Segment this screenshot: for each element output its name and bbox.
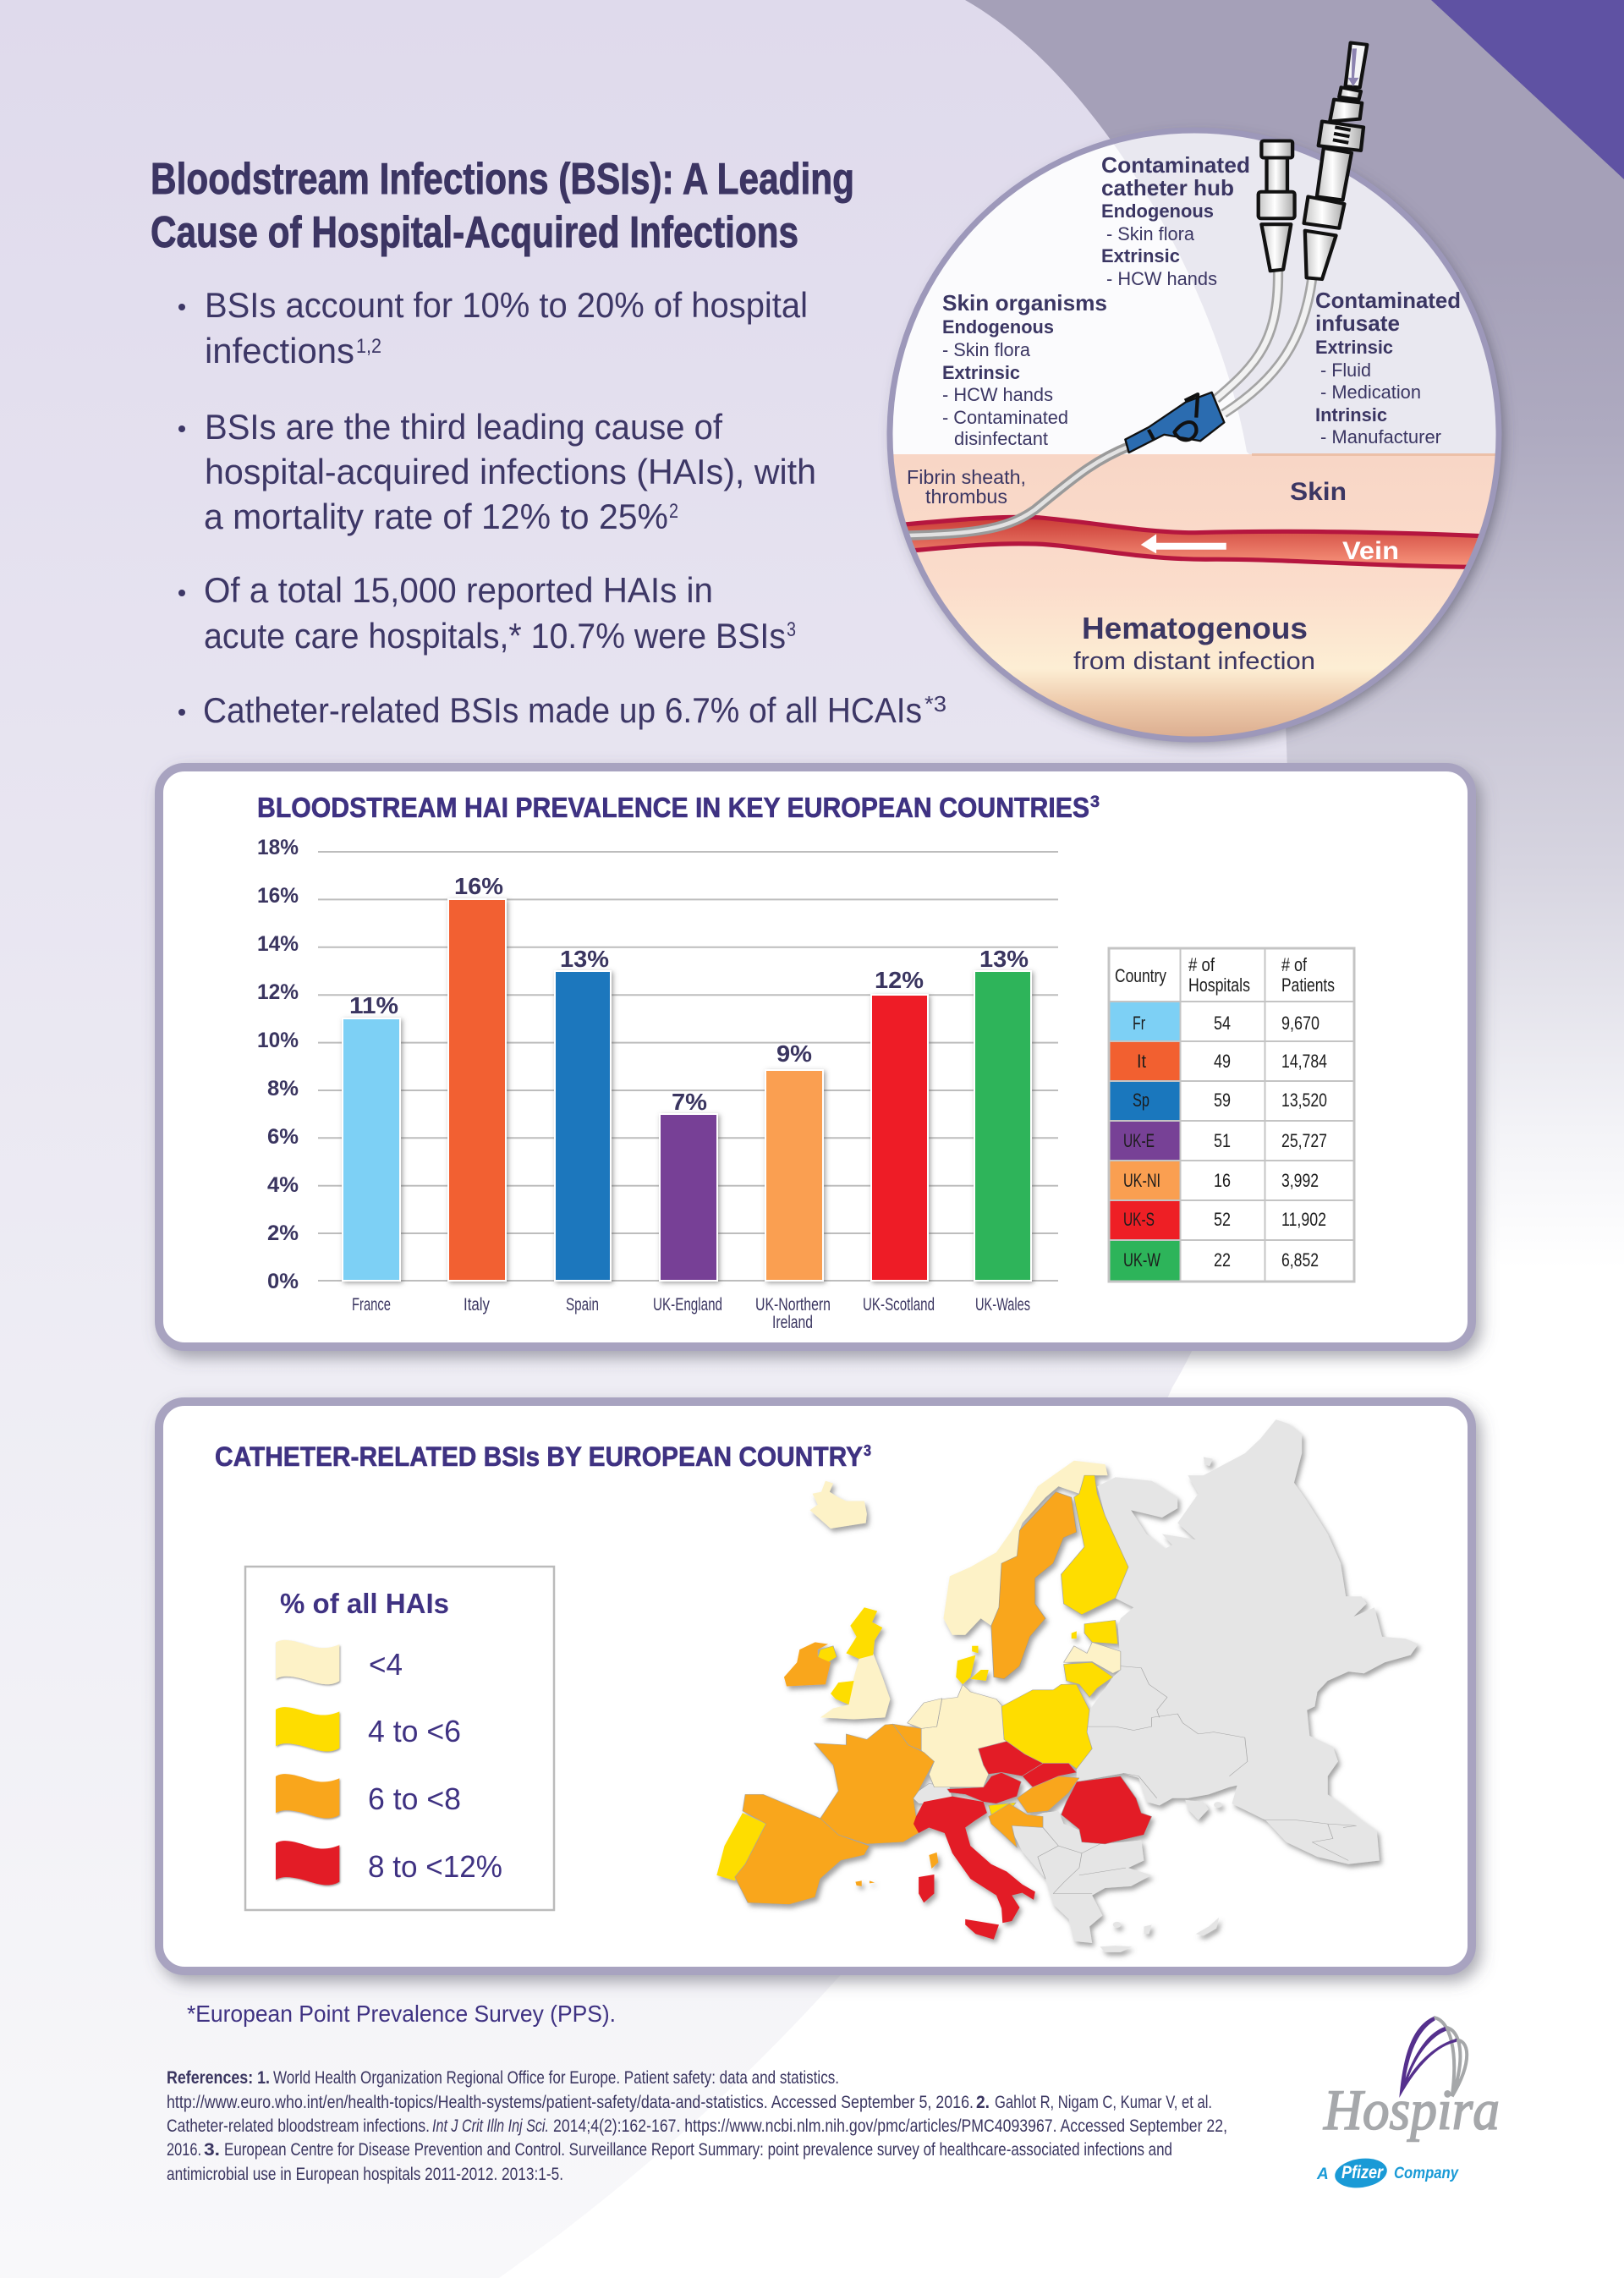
diagram label: contaminated infusate: - Manufacturer [1320,426,1441,447]
diagram label: skin organisms [942,290,1107,449]
diagram label: contaminated infusate: infusate [1315,310,1400,336]
legend: % of all HAIs [280,1588,449,1619]
catheter hubs, tubes and connector [1125,43,1367,453]
references: 2. [976,2093,990,2112]
legend: <4 [369,1647,403,1682]
references: 2016. [167,2140,201,2160]
data table: 9,670 [1281,1013,1320,1034]
bars [343,899,1031,1281]
footnote: *European Point Prevalence Survey (PPS). [187,2001,616,2027]
bullet list: infections [205,331,354,371]
diagram label: contaminated catheter hub: catheter hub [1101,175,1234,200]
countries 6 to under 8 percent [735,1492,1079,1905]
panel heading: 3 [1090,793,1100,811]
data table: It [1137,1051,1146,1072]
data table: # of [1281,954,1308,975]
y axis labels: 8% [267,1077,299,1101]
bullet list [178,285,946,730]
x axis labels: France [352,1295,391,1315]
diagram label: skin organisms: Extrinsic [942,362,1020,383]
diagram label: skin organisms: Skin organisms [942,290,1107,316]
bullet list: 2 [669,500,678,523]
bullet list: *3 [924,691,946,716]
y axis labels: 16% [257,884,299,908]
logo: Hospira, a Pfizer company: Company [1394,2165,1459,2182]
bar chart [257,836,1058,1332]
diagram label: contaminated infusate: - Fluid [1320,360,1371,381]
bullet list: Catheter-related BSIs made up 6.7% of all HCAIs [203,690,922,730]
x axis labels: Italy [464,1295,490,1315]
references: 3. [204,2140,220,2160]
bullet list: 1,2 [356,335,381,358]
panel: catheter-related BSIs map [159,1402,1472,1971]
y axis labels: 12% [257,980,299,1004]
diagram label: contaminated catheter hub: - Skin flora [1106,223,1195,244]
diagram labels: skin, vein, fibrin sheath, hematogenous: from distant infection [1073,648,1315,675]
diagram label: contaminated catheter hub: Endogenous [1101,200,1214,222]
diagram labels: skin, vein, fibrin sheath, hematogenous: Skin [1290,478,1347,506]
diagram label: contaminated catheter hub: Extrinsic [1101,245,1180,266]
panel: bloodstream HAI prevalence [159,767,1472,1347]
bar value labels: 13% [560,946,609,972]
data table: # of [1188,954,1215,975]
title: Bloodstream Infections (BSIs): A Leading [151,155,854,204]
data table: UK-W [1123,1249,1160,1271]
diagram label: contaminated infusate: Intrinsic [1315,404,1387,425]
diagram label: contaminated infusate: Extrinsic [1315,337,1393,358]
diagram label: contaminated infusate [1315,288,1461,447]
non-reporting countries [911,1419,1418,1952]
references: World Health Organization Regional Office for Europe. Patient safety: data and statistics. [273,2068,839,2088]
y axis labels: 6% [267,1125,299,1149]
y axis labels: 18% [257,836,299,859]
diagram labels: skin, vein, fibrin sheath, hematogenous [907,466,1399,675]
bar value labels: 9% [776,1040,812,1067]
x axis labels: UK-Scotland [863,1295,935,1315]
data table: 54 [1214,1013,1231,1034]
title [151,155,854,257]
panel heading: BLOODSTREAM HAI PREVALENCE IN KEY EUROPEAN COUNTRIES [257,792,1089,823]
data table: UK-NI [1123,1170,1160,1191]
bar value labels: 16% [454,873,503,899]
bar value labels: 13% [979,946,1029,972]
panel heading: 3 [864,1442,871,1459]
y axis labels: 2% [267,1221,299,1245]
data table: 13,520 [1281,1090,1327,1111]
logo: Hospira, a Pfizer company: Pfizer [1341,2163,1385,2182]
data table: 22 [1214,1249,1231,1271]
data table: 52 [1214,1209,1231,1230]
data table: 49 [1214,1051,1231,1072]
diagram label: contaminated catheter hub: - HCW hands [1106,268,1217,289]
diagram label: contaminated infusate: Contaminated [1315,288,1461,313]
data table: Hospitals [1188,974,1250,996]
countries 4 to under 6 percent [716,1475,1128,1880]
diagram labels: skin, vein, fibrin sheath, hematogenous: Vein [1342,537,1399,565]
references: http://www.euro.who.int/en/health-topics/Health-systems/patient-safety/data-and-statistics. Accessed September 5, 2016. [167,2093,974,2112]
data table: Country [1115,965,1166,986]
data table: UK-S [1123,1209,1155,1230]
references: 2014;4(2):162-167. https://www.ncbi.nlm.nih.gov/pmc/articles/PMC4093967. Accessed September 22, [553,2116,1227,2136]
references [167,2068,1227,2184]
logo: Hospira, a Pfizer company [1316,2017,1500,2191]
references: Gahlot R, Nigam C, Kumar V, et al. [995,2093,1212,2112]
bullet list: BSIs account for 10% to 20% of hospital [205,285,808,325]
panel heading: CATHETER-RELATED BSIs BY EUROPEAN COUNTRY [215,1441,863,1472]
bar value labels: 7% [672,1089,707,1115]
bar value labels [349,873,1029,1115]
diagram label: contaminated infusate: - Medication [1320,381,1421,403]
y axis labels [257,836,299,1293]
x axis labels: UK-Northern [755,1295,831,1315]
diagram labels: skin, vein, fibrin sheath, hematogenous: thrombus [925,486,1007,508]
x axis labels [352,1295,1030,1332]
diagram label: skin organisms: - Contaminated [942,407,1068,428]
data table: Sp [1133,1090,1149,1111]
y axis labels: 10% [257,1029,299,1052]
catheter infection diagram [880,0,1506,746]
bullet list: 3 [787,618,796,641]
bullet list: acute care hospitals,* 10.7% were BSIs [204,616,786,656]
y axis labels: 0% [267,1270,299,1293]
data table: 16 [1214,1170,1231,1191]
references: References: 1. [167,2068,270,2088]
bullet list: hospital-acquired infections (HAIs), with [205,452,816,491]
data table: 11,902 [1281,1209,1326,1230]
data table: UK-E [1123,1130,1155,1151]
bullet list: a mortality rate of 12% to 25% [204,497,668,536]
diagram labels: skin, vein, fibrin sheath, hematogenous: Hematogenous [1082,611,1308,645]
bar value labels: 11% [349,992,398,1018]
diagram label: skin organisms: - HCW hands [942,384,1053,405]
logo: Hospira, a Pfizer company: Hospira [1323,2078,1500,2142]
purple corner triangle [1431,0,1624,179]
data table: 59 [1214,1090,1231,1111]
x axis labels: Spain [566,1295,599,1315]
data table: 25,727 [1281,1130,1327,1151]
diagram labels: skin, vein, fibrin sheath, hematogenous: Fibrin sheath, [907,466,1026,488]
legend: 6 to <8 [368,1781,461,1816]
data table: 6,852 [1281,1249,1319,1271]
map of Europe [716,1419,1418,1952]
legend: 8 to <12% [368,1849,502,1884]
diagram label: skin organisms: Endogenous [942,316,1054,338]
data table: 14,784 [1281,1051,1327,1072]
bullet list: BSIs are the third leading cause of [205,407,722,447]
y axis labels: 14% [257,932,299,956]
data table: 3,992 [1281,1170,1319,1191]
countries under 4 percent [810,1461,1121,1787]
legend [245,1567,554,1910]
data table: 51 [1214,1130,1231,1151]
bar value labels: 12% [875,967,924,993]
x axis labels: Ireland [772,1313,813,1332]
countries 8 to under 12 percent [914,1742,1152,1940]
legend: 4 to <6 [368,1714,461,1748]
y axis labels: 4% [267,1173,299,1197]
diagram label: skin organisms: disinfectant [954,428,1048,449]
diagram label: skin organisms: - Skin flora [942,339,1031,360]
references: antimicrobial use in European hospitals 2011-2012. 2013:1-5. [167,2165,563,2184]
data table [1109,948,1354,1282]
diagram label: contaminated catheter hub: Contaminated [1101,152,1250,178]
references: European Centre for Disease Prevention and Control. Surveillance Report Summary: point prevalence survey of healthcare-associated infections and [224,2140,1172,2160]
data table: Fr [1133,1013,1145,1034]
title: Cause of Hospital-Acquired Infections [151,208,798,257]
diagram label: contaminated catheter hub [1101,152,1250,289]
data table: Patients [1281,974,1335,996]
x axis labels: UK-Wales [975,1295,1030,1315]
bullet list: Of a total 15,000 reported HAIs in [204,570,713,610]
logo: Hospira, a Pfizer company: A [1316,2165,1329,2183]
x axis labels: UK-England [653,1295,722,1315]
references: Catheter-related bloodstream infections. [167,2116,430,2136]
references: Int J Crit Illn Inj Sci. [432,2116,549,2136]
